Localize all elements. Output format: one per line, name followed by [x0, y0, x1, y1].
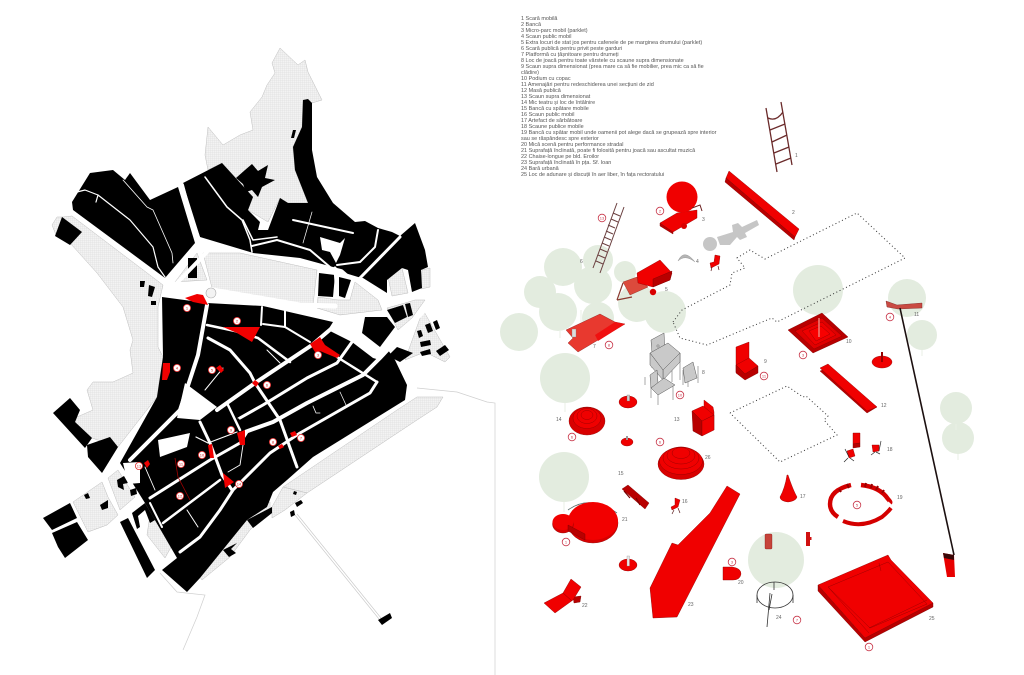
legend text list: 14 Mic teatru și loc de întâlnire	[521, 100, 595, 106]
object number labels: 7	[593, 344, 596, 350]
dotted outline: lower footprint	[730, 386, 837, 462]
object number labels: 1	[795, 153, 798, 159]
red intervention sites on map	[144, 294, 340, 500]
streets	[72, 177, 423, 552]
legend text list: 24 Bară urbană	[521, 166, 559, 172]
legend text list: 21 Suprafață înclinată, poate fi folosită pentru joacă sau ascultat muzică	[521, 148, 695, 154]
object number labels: 23	[688, 602, 694, 608]
numbered markers on map	[135, 304, 322, 500]
dotted outline: upper footprint	[673, 213, 905, 345]
numbered markers on map: 14	[237, 482, 242, 486]
object 22: chaise longue	[544, 579, 581, 613]
circled reference markers on objects: 2	[659, 208, 662, 214]
object number labels: 24	[776, 615, 782, 621]
legend text list: 17 Artefact de sărbătoare	[521, 118, 582, 124]
circled reference markers on objects	[562, 207, 894, 651]
object 4: small chair	[710, 255, 720, 271]
object number labels: 22	[582, 603, 588, 609]
panel: trees	[500, 245, 974, 588]
object number labels: 12	[881, 403, 887, 409]
numbered markers on map: 12	[178, 494, 183, 498]
circled reference markers on objects: 13	[600, 216, 605, 220]
object number labels: 25	[929, 616, 935, 622]
object number labels: 16	[682, 499, 688, 505]
legend text list: 6 Scară publică pentru privit peste garduri	[521, 46, 622, 52]
object 5: trailer with seats	[617, 260, 672, 300]
legend text list: 22 Chaise-longue pe bld. Eroilor	[521, 154, 599, 160]
circled reference markers on objects: 5	[856, 502, 859, 508]
legend text list: 5 Extra locuri de stat jos pentru cafenele de pe marginea drumului (parklet)	[521, 40, 702, 46]
object 8: oversized grey chairs	[645, 333, 698, 405]
object number labels: 8	[702, 370, 705, 376]
object 2: bench	[725, 171, 799, 240]
roundabout	[206, 288, 216, 298]
legend text list: 16 Scaun public mobil	[521, 112, 575, 118]
object 19: ring bench	[830, 483, 891, 524]
legend text list: 2 Bancă	[521, 22, 541, 28]
stand: disc with small figure	[619, 395, 637, 408]
object number labels: 20	[738, 580, 744, 586]
pier	[295, 514, 381, 619]
object 23: inclined surface	[650, 486, 740, 618]
object 9: oversized red chair	[736, 342, 758, 380]
circled reference markers on objects: 10	[678, 392, 683, 398]
legend text list: 18 Scaune publice mobile	[521, 124, 584, 130]
object 12: public table	[820, 364, 877, 413]
circled reference markers on objects: 3	[802, 352, 805, 358]
object 25: gathering platform	[818, 555, 933, 642]
object number labels: 19	[897, 495, 903, 501]
object number labels: 17	[800, 494, 806, 500]
legend text list: 12 Masă publică	[521, 88, 561, 94]
numbered markers on map: 7	[300, 436, 303, 440]
numbered markers on map: 5	[211, 368, 214, 372]
circled reference markers on objects: 7	[796, 618, 799, 622]
object 6: public ladder	[593, 203, 624, 273]
object 13: oversized red chair	[692, 400, 714, 436]
numbered markers on map: 9	[230, 428, 233, 432]
object 24: urban bar	[757, 582, 793, 627]
object 4: grey hopscotch	[703, 220, 759, 251]
object number labels: 26	[705, 455, 711, 461]
object 26: stepped cone	[658, 447, 704, 480]
object number labels: 9	[764, 359, 767, 365]
object number labels: 15	[618, 471, 624, 477]
numbered markers on map: 1	[186, 306, 189, 310]
coastline and drawing edge	[160, 388, 495, 675]
circled reference markers on objects: 1	[868, 644, 871, 650]
object 11: red end post	[943, 553, 955, 577]
object 17: festive artefact	[780, 475, 797, 502]
object 4: grey arc seat	[678, 255, 695, 262]
legend text list	[521, 16, 716, 178]
legend text list: 4 Scaun public mobil	[521, 34, 571, 40]
object number labels: 6	[580, 259, 583, 265]
numbered markers on map: 10	[200, 452, 205, 458]
black building mass: old town	[120, 297, 449, 592]
circled reference markers on objects: 6	[571, 434, 574, 440]
circled reference markers on objects: 3	[731, 560, 734, 564]
legend text list: 3 Micro-parc mobil (parklet)	[521, 28, 588, 34]
object number labels: 5	[665, 287, 668, 293]
object number labels: 10	[846, 339, 852, 345]
object 18: movable chairs	[844, 433, 881, 462]
object 24 artefacts: red posts	[765, 532, 812, 549]
legend text list: 8 Loc de joacă pentru toate vârstele cu scaune supra dimensionate	[521, 58, 684, 64]
object number labels: 18	[887, 447, 893, 453]
object 11: long black bar	[900, 308, 954, 555]
circled reference markers on objects: 6	[659, 440, 662, 444]
numbered markers on map: 8	[272, 440, 275, 444]
object number labels: 2	[792, 210, 795, 216]
legend text list: 7 Platformă cu țâșnitoare pentru drumeți	[521, 52, 619, 58]
object 14: tiered theatre	[569, 407, 605, 435]
legend text list: 20 Mică scenă pentru performance stradal	[521, 142, 623, 148]
numbered markers on map: 4	[176, 366, 179, 370]
object 10: stepped podium with tree	[788, 313, 848, 353]
object 15: bench with movable backs	[622, 485, 649, 509]
object 7: platform with fountain	[566, 314, 625, 352]
legend text list: 15 Bancă cu spătare mobile	[521, 106, 589, 112]
object 21: inclined surface	[552, 502, 618, 543]
circled reference markers on objects: 8	[608, 342, 611, 348]
legend text list: 1 Scară mobilă	[521, 16, 557, 22]
object 1: mobile ladder	[766, 102, 792, 172]
object number labels: 11	[914, 312, 919, 318]
stand: disc with white post	[619, 556, 637, 571]
object number labels: 13	[674, 417, 680, 423]
legend text list: 13 Scaun supra dimensionat	[521, 94, 590, 100]
legend text list: 10 Podium cu copac	[521, 76, 571, 82]
numbered markers on map: 3	[317, 352, 320, 358]
black building mass: west and south edge	[43, 398, 392, 625]
numbered markers on map: 11	[179, 462, 184, 466]
circled reference markers on objects: 11	[762, 374, 767, 378]
legend text list: 23 Suprafață înclinată în pța. Sf. Ioan	[521, 160, 611, 166]
numbered markers on map: 6	[266, 382, 269, 388]
object number labels: 3	[702, 217, 705, 223]
panel: city map	[43, 48, 495, 675]
legend text list: 19 Bancă cu spătar mobil unde oamenii pot alege dacă se grupează spre interior	[521, 130, 716, 136]
hatched ground areas	[52, 48, 450, 580]
black building mass: north	[55, 99, 428, 305]
circled reference markers on objects: 1	[565, 540, 568, 544]
object 20: small stage	[723, 567, 741, 580]
object number labels: 14	[556, 417, 562, 423]
circled reference markers on objects: 4	[889, 314, 892, 320]
legend text list: 9 Scaun supra dimensionat (prea mare ca să fie mobilier, prea mic ca să fie	[521, 64, 704, 70]
legend text list: sau se răspândesc spre exterior	[521, 136, 599, 142]
legend text list: 25 Loc de adunare și discuții în aer liber, în fața rectoratului	[521, 172, 664, 178]
object number labels: 4	[696, 259, 699, 265]
legend text list: clădire)	[521, 70, 539, 76]
object 11: red wall fragment	[886, 301, 922, 309]
legend text list: 11 Amenajări pentru redeschiderea unei secțiuni de zid	[521, 82, 654, 88]
object 3: micro park with sphere	[660, 182, 702, 234]
object 12 stand: disc with post	[872, 352, 892, 368]
object number labels	[556, 153, 935, 622]
stand: small disc	[621, 436, 633, 446]
numbered markers on map: 13	[137, 464, 142, 468]
object 16: public chair	[671, 498, 680, 514]
object number labels: 21	[622, 517, 628, 523]
numbered markers on map: 2	[236, 318, 239, 324]
